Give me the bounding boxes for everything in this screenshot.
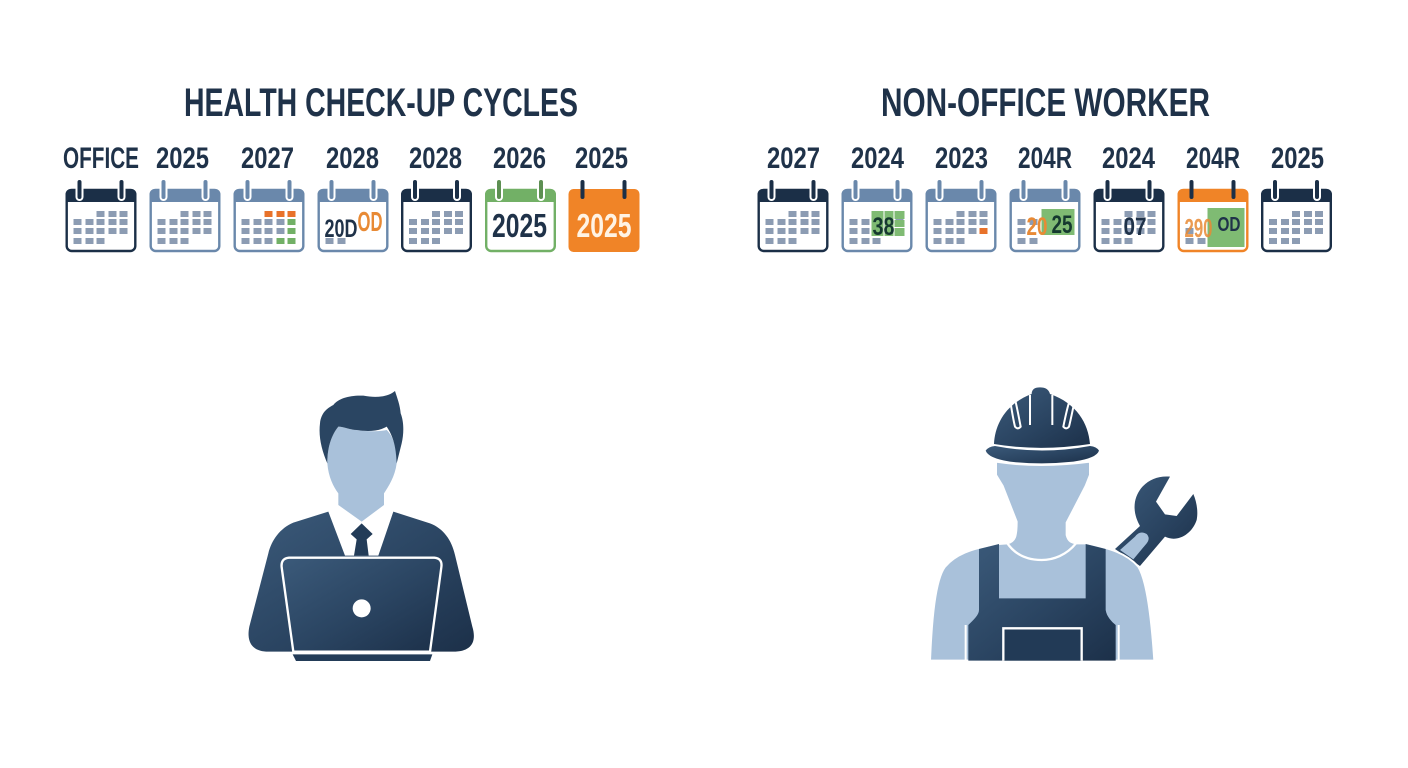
icon: blue calendar with 20D OD: 20D bbox=[324, 215, 358, 243]
icon: blue calendar with overlaid 20 25: 25 bbox=[1052, 211, 1073, 239]
panel: office calendars row bbox=[63, 142, 640, 252]
icon: orange calendar 2025: 2025 bbox=[576, 207, 632, 244]
label: 2025 last: 2025 bbox=[575, 142, 628, 175]
wrench bbox=[1115, 476, 1197, 566]
icon: blue calendar with orange and green cells bbox=[234, 182, 304, 251]
icon: blue calendar with green patch and 38: 38 bbox=[872, 213, 895, 241]
label: office: OFFICE bbox=[63, 142, 139, 175]
overalls bbox=[968, 544, 1116, 661]
laptop logo bbox=[353, 599, 371, 617]
hat brim bbox=[986, 446, 1099, 463]
icon: non-office worker with hard hat and wrench bbox=[930, 387, 1197, 661]
label: 2028: 2028 bbox=[326, 142, 379, 175]
hair bbox=[320, 391, 403, 463]
icon: blue calendar with 20D OD: OD bbox=[358, 206, 382, 237]
neckline bbox=[1007, 543, 1076, 560]
icon: navy calendar bbox=[758, 182, 828, 251]
icon: blue calendar with one orange cell bbox=[926, 182, 996, 251]
label: 2023: 2023 bbox=[935, 142, 988, 175]
label: 2026: 2026 bbox=[493, 142, 546, 175]
icon: blue calendar with 20D OD bbox=[318, 182, 388, 251]
body bbox=[930, 462, 1154, 661]
title: non-office worker: NON-OFFICE WORKER bbox=[881, 81, 1210, 125]
tie bbox=[351, 523, 373, 556]
label: 204R: 204R bbox=[1018, 142, 1072, 175]
icon: orange calendar 2025 bbox=[568, 182, 640, 252]
icon: orange outlined calendar with 290 OD bbox=[1178, 182, 1248, 251]
icon: orange outlined calendar with 290 OD: 290 bbox=[1184, 213, 1212, 243]
label: 2028 second: 2028 bbox=[409, 142, 462, 175]
panel: non-office calendars row bbox=[758, 142, 1332, 251]
icon: navy calendar with 07: 07 bbox=[1124, 213, 1146, 241]
overall side lines bbox=[966, 625, 1119, 661]
laptop bbox=[282, 558, 442, 652]
icon: navy calendar bbox=[66, 182, 136, 251]
wrench slot bbox=[1120, 532, 1149, 559]
label: 204R second: 204R bbox=[1186, 142, 1240, 175]
icon: office worker with laptop bbox=[249, 391, 474, 661]
label: 2025: 2025 bbox=[1271, 142, 1324, 175]
icon: blue calendar with green patch and 38 bbox=[842, 182, 912, 251]
label: 2027: 2027 bbox=[241, 142, 294, 175]
icon: green calendar 2025: 2025 bbox=[492, 207, 547, 244]
icon: navy calendar with 07 bbox=[1094, 182, 1164, 251]
pocket bbox=[1003, 628, 1082, 661]
label: 2024: 2024 bbox=[851, 142, 904, 175]
hard hat dome bbox=[994, 387, 1090, 448]
icon: green calendar 2025 bbox=[485, 182, 556, 251]
icon: navy calendar second bbox=[401, 182, 472, 251]
title: health check-up cycles: HEALTH CHECK-UP CYCLES bbox=[184, 81, 578, 125]
label: 2027: 2027 bbox=[767, 142, 820, 175]
icon: navy calendar last bbox=[1261, 182, 1332, 251]
laptop base bbox=[293, 654, 432, 661]
icon: orange outlined calendar with 290 OD: OD bbox=[1218, 214, 1240, 236]
icon: blue calendar bbox=[150, 182, 220, 251]
icon: blue calendar with overlaid 20 25 bbox=[1010, 182, 1080, 251]
label: 2025: 2025 bbox=[156, 142, 209, 175]
body: suit bbox=[249, 512, 474, 652]
face bbox=[327, 427, 397, 522]
icon: blue calendar with overlaid 20 25: 20 bbox=[1026, 213, 1048, 241]
label: 2024 second: 2024 bbox=[1102, 142, 1155, 175]
hat ridges bbox=[1010, 395, 1075, 428]
